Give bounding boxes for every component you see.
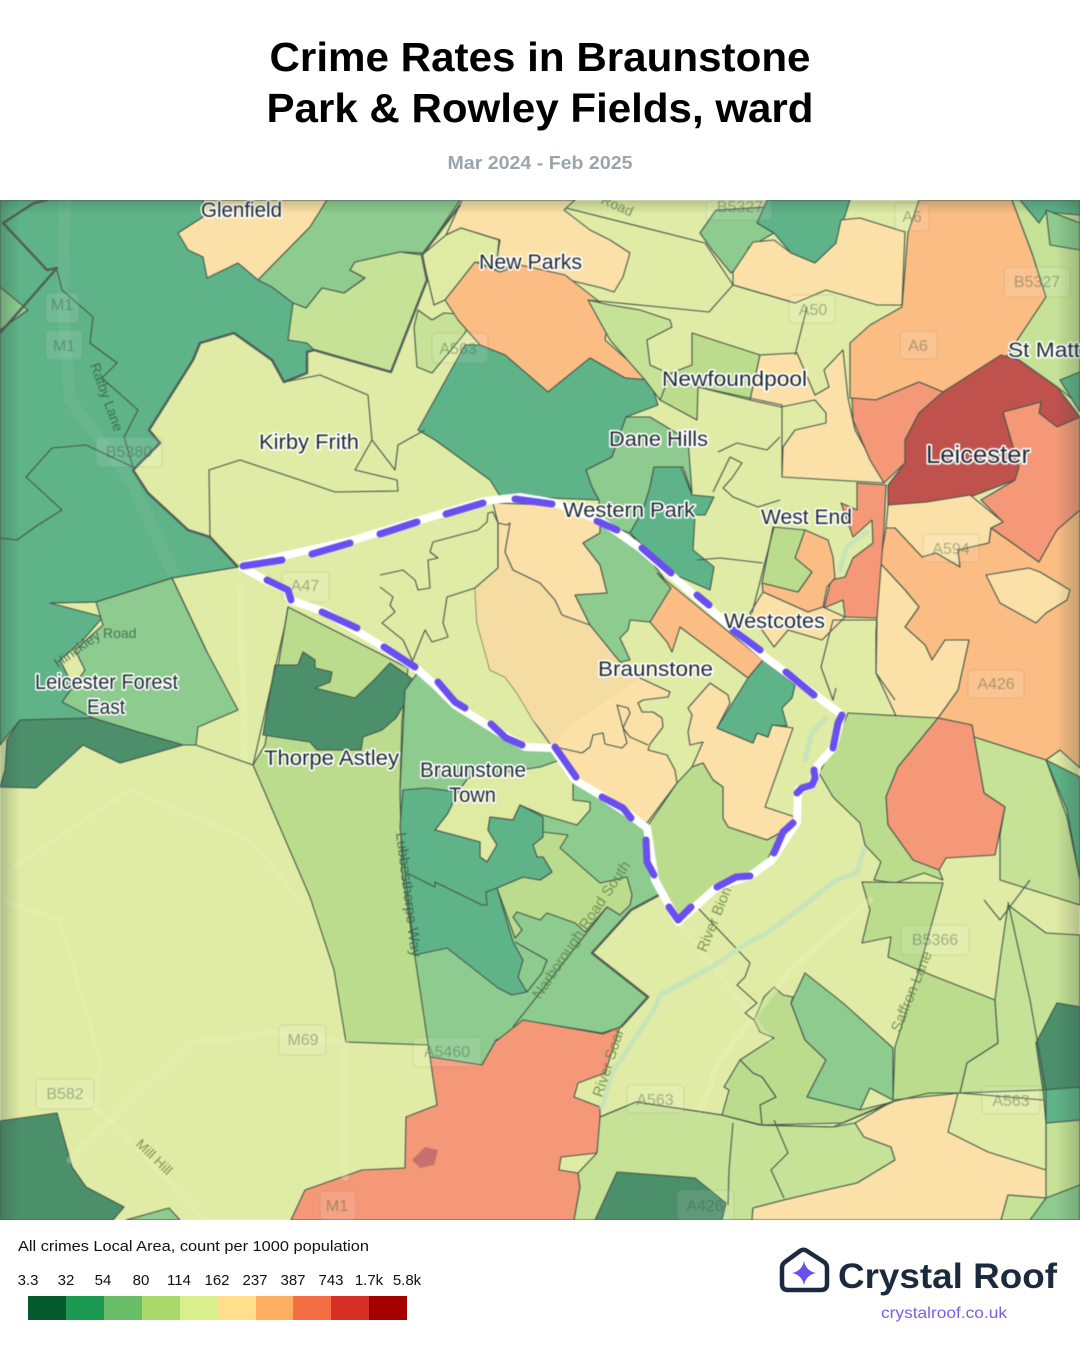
road names and shields: A47: [291, 578, 319, 595]
road names and shields: A5460: [424, 1044, 470, 1061]
place labels: Braunstone: [420, 759, 526, 782]
area polygons: north centre: [418, 200, 905, 590]
road names and shields: A426: [977, 676, 1015, 693]
rivers: [602, 532, 867, 1107]
legend scale values: 114: [167, 1272, 191, 1289]
road names and shields: A50: [799, 302, 827, 319]
ward boundary route: white line with purple dashes: [240, 497, 842, 922]
place labels: Thorpe Astley: [264, 747, 400, 770]
legend scale values: 3.3: [18, 1272, 38, 1289]
area polygons: west: [0, 200, 472, 1220]
legend scale values: 54: [95, 1272, 111, 1289]
road names and shields: A426: [686, 1198, 724, 1215]
place labels: Westcotes: [724, 610, 825, 633]
legend scale values: 1.7k: [355, 1272, 384, 1289]
road names and shields: Saffron Lane: [888, 949, 936, 1034]
road names and shields: M1: [326, 1198, 348, 1215]
place labels: Town: [449, 784, 496, 807]
road names and shields: [36, 191, 1070, 1220]
place labels: Western Park: [563, 499, 696, 522]
logo: Crystal Roof: [782, 1250, 1057, 1322]
place labels: West End: [761, 506, 852, 529]
place labels: Leicester Forest: [35, 671, 178, 694]
title: Park & Rowley Fields, ward: [266, 85, 814, 131]
map base: low crime areas: [0, 200, 1080, 1220]
place labels: Leicester: [926, 441, 1030, 469]
road names and shields: B582: [46, 1086, 84, 1103]
road names and shields: B5327: [1014, 274, 1060, 291]
area polygons: south and east: [291, 713, 1080, 1220]
road names and shields: River Soar: [590, 1027, 628, 1099]
brand name: Crystal Roof: [838, 1257, 1057, 1296]
title: Crime Rates in Braunstone: [270, 34, 810, 80]
road names and shields: A563: [992, 1093, 1030, 1110]
brand url: crystalroof.co.uk: [881, 1305, 1008, 1322]
road names and shields: River Biom: [694, 880, 737, 954]
road names and shields: A563: [636, 1092, 674, 1109]
road names and shields: Mill Hill: [133, 1136, 176, 1178]
choropleth map: [0, 191, 1080, 1220]
legend: [18, 1238, 422, 1320]
road names and shields: B5380: [106, 444, 152, 461]
icon: house with sparkle: [782, 1250, 827, 1290]
date range subtitle: Mar 2024 - Feb 2025: [448, 153, 632, 173]
roads (faint): [66, 897, 873, 1180]
road names and shields: Lubbesthorpe Way: [392, 831, 424, 958]
legend scale values: 32: [58, 1272, 74, 1289]
road names and shields: B5366: [912, 932, 958, 949]
road names and shields: A6: [908, 338, 928, 355]
road names and shields: M69: [287, 1032, 319, 1049]
road names and shields: M1: [51, 297, 73, 314]
legend scale values: 80: [133, 1272, 149, 1289]
place labels: Kirby Frith: [259, 431, 359, 454]
road names and shields: Hinckley: [51, 627, 103, 670]
place labels: [35, 199, 1080, 807]
road names and shields: A594: [932, 541, 970, 558]
area polygons: Braunstone: [475, 503, 795, 920]
legend scale values: [18, 1272, 422, 1289]
title: [266, 34, 814, 131]
road names and shields: Road: [599, 191, 636, 219]
legend scale values: 237: [242, 1272, 268, 1289]
road names and shields: A6: [902, 209, 922, 226]
area polygons: city centre: [750, 200, 1080, 768]
place labels: New Parks: [479, 251, 582, 274]
area polygons: Thorpe Astley and Lubbesthorpe: [253, 607, 659, 1065]
map edge shading: [0, 200, 1080, 1220]
road names and shields: Road: [103, 625, 136, 641]
road names and shields: Ratby Lane: [87, 361, 127, 434]
place labels: Glenfield: [201, 199, 282, 222]
legend scale values: 162: [204, 1272, 230, 1289]
boundary lines: [0, 200, 1046, 1205]
legend scale values: 387: [280, 1272, 306, 1289]
road names and shields: B5327: [717, 199, 763, 216]
road names and shields: Narborough Road South: [529, 858, 634, 1002]
legend scale values: 5.8k: [393, 1272, 422, 1289]
place labels: Dane Hills: [609, 428, 708, 451]
road names and shields: A563: [439, 341, 477, 358]
place labels: East: [87, 696, 125, 719]
place labels: St Matt: [1008, 339, 1080, 362]
place labels: Braunstone: [598, 658, 713, 681]
legend scale values: 743: [318, 1272, 344, 1289]
place labels: Newfoundpool: [662, 368, 807, 391]
legend title: All crimes Local Area, count per 1000 population: [18, 1238, 369, 1255]
legend colour bar: [28, 1296, 407, 1320]
road names and shields: M1: [53, 338, 75, 355]
